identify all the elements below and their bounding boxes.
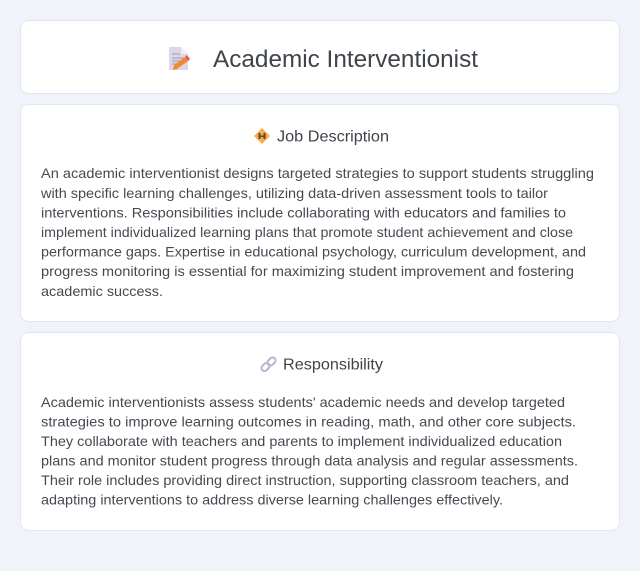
- panel: responsibility: [20, 332, 620, 530]
- text block: responsibility: They collaborate with teachers and parents to implement individualized education: [41, 433, 562, 449]
- text block: job description: interventions. Responsibilities include collaborating with educators and families to: [41, 204, 566, 220]
- text block: job description: with specific learning challenges, utilizing data-driven assessment tools to tailor: [40, 185, 548, 201]
- icon: document with pencil: [169, 47, 190, 70]
- panel: title card: [20, 20, 620, 94]
- text block: responsibility: strategies to improve learning outcomes in reading, math, and other core subjects.: [41, 414, 576, 430]
- text block: job description: implement individualized learning plans that promote student achievement and close: [41, 224, 573, 240]
- text block: responsibility: Academic interventionists assess students' academic needs and develop targeted: [41, 394, 565, 410]
- panel: job description: [20, 104, 620, 322]
- icon: orange diamond: [254, 128, 270, 144]
- text block: job description: An academic interventionist designs targeted strategies to support students struggling: [41, 165, 594, 181]
- title: Academic Interventionist: [213, 46, 478, 73]
- text block: job description: performance gaps. Expertise in educational psychology, curriculum development, and: [41, 244, 586, 260]
- text block: job description: [40, 165, 594, 299]
- text block: job description: academic success.: [41, 283, 163, 299]
- text block: responsibility: plans and monitor student progress through data analysis and regular assessments.: [41, 452, 578, 468]
- heading: job description: Job Description: [277, 128, 389, 146]
- text block: responsibility: [41, 394, 578, 508]
- text block: responsibility: Their role includes providing direct instruction, supporting classroom teachers, and: [41, 472, 569, 488]
- heading: responsibility: Responsibility: [283, 356, 383, 374]
- text block: job description: progress monitoring is essential for maximizing student improvement and fostering: [41, 263, 574, 279]
- text block: responsibility: adapting interventions to address diverse learning challenges effectively.: [41, 492, 503, 508]
- icon: chain link: [260, 356, 277, 372]
